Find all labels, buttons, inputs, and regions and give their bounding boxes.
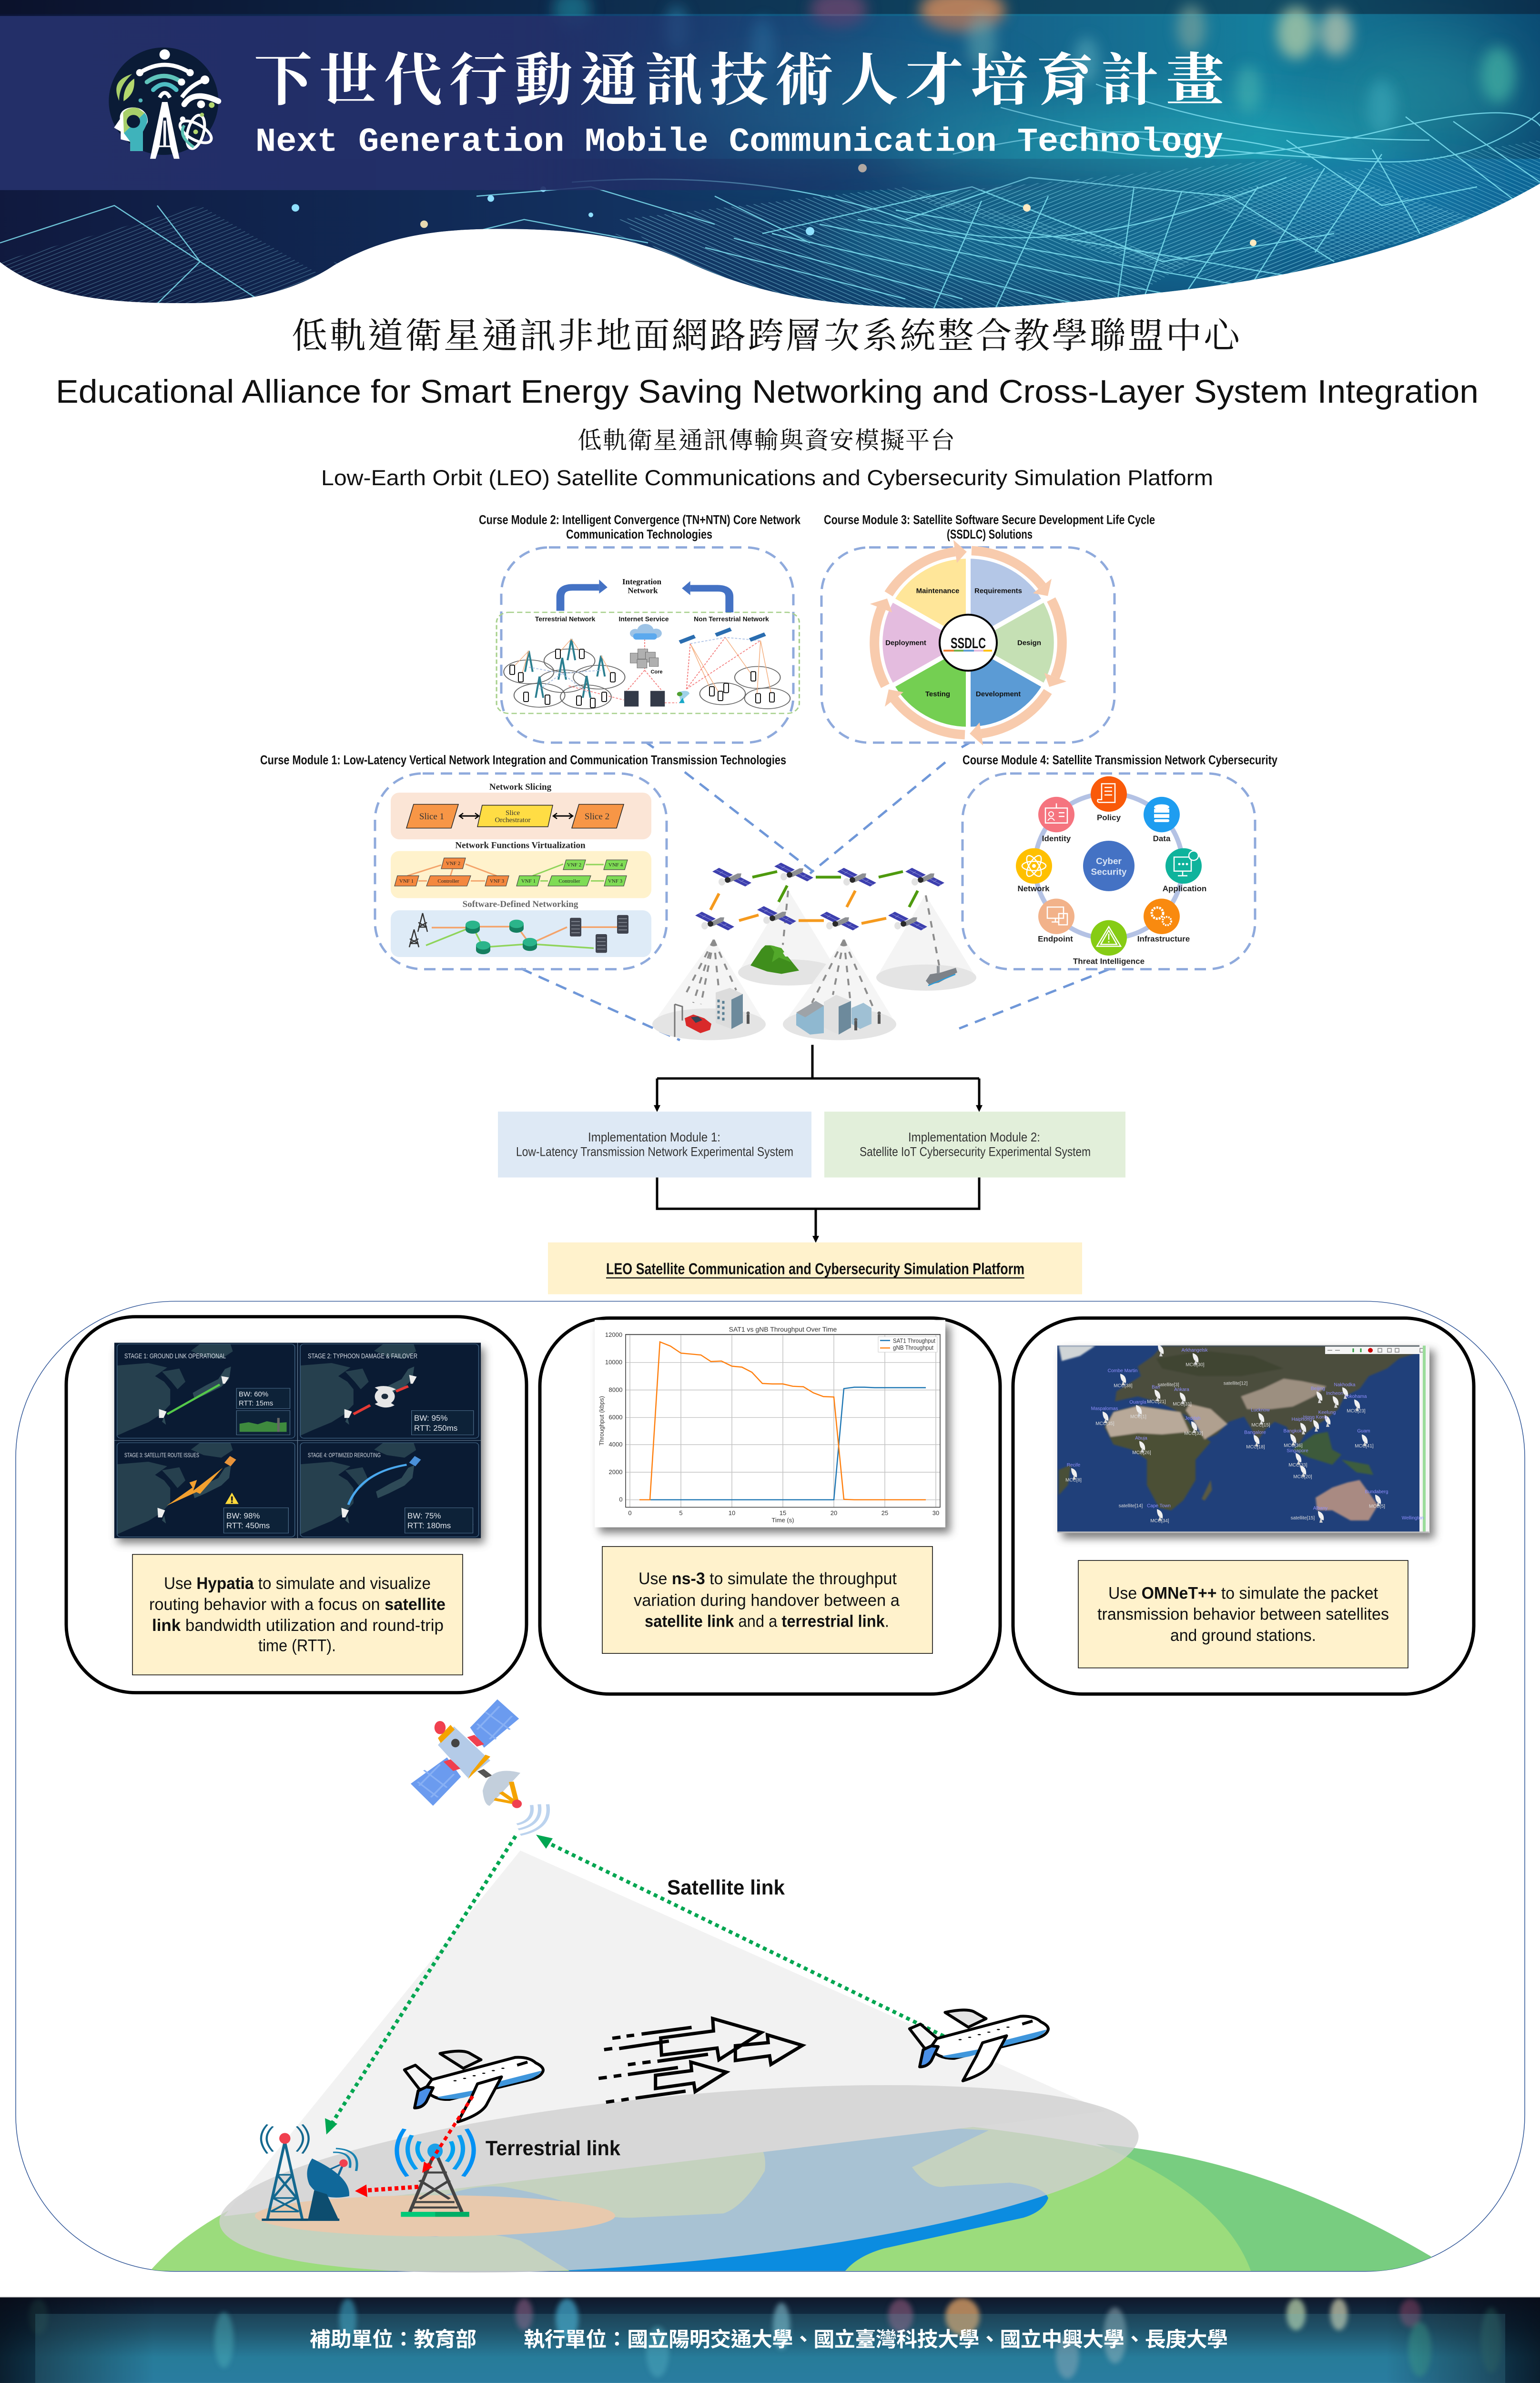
chart: throughput over time: SAT1 Throughput [893,1337,935,1344]
screenshot: OMNeT++ world map: satellite[3] [1158,1383,1179,1388]
screenshot: OMNeT++ world map: MCC[41] [1355,1444,1374,1449]
chart: SSDLC cycle wheel [845,526,1091,760]
box: simulation platform: LEO Satellite Communication and Cybersecurity Simulation Platform [606,1261,1024,1278]
diagram: network slicing: Network Slicing [489,782,552,792]
screenshot: OMNeT++ world map: Haiphong [1292,1417,1312,1422]
heading: course module 2: Communication Technologies [566,527,712,541]
link: satellite link dotted arrows [325,1834,950,2135]
box: simulation platform [548,1242,1082,1294]
label: satellite link: Satellite link [667,1876,785,1899]
box: implementation module 2: Satellite IoT Cybersecurity Experimental System [860,1145,1091,1159]
screenshot: OMNeT++ world map: Hong Kong [1303,1415,1327,1420]
diagram: network functions virtualization: Controller [558,878,580,884]
coverage cone: mountain [738,890,838,986]
screenshot: OMNeT++ world map: Nakhodka [1334,1383,1356,1388]
chart: throughput over time: 0 [628,1509,632,1517]
diagram: integration network: Network [628,586,658,595]
caption: Hypatia: routing behavior with a focus on satellite [149,1595,446,1614]
icon: airplane left [405,2051,543,2122]
caption: OMNeT++: transmission behavior between satellites [1097,1605,1389,1624]
screenshot: OMNeT++ world map: MCC[1] [1130,1414,1146,1419]
screenshot: OMNeT++ world map: MCC[23] [1347,1409,1366,1414]
screenshot: OMNeT++ world map: MCC[8] [1065,1478,1082,1483]
heading: alliance English: Educational Alliance for Smart Energy Saving Networking and Cross-Layer System Integration [56,373,1479,410]
chart: SSDLC cycle wheel: Requirements [974,588,1022,595]
heading: course module 4: Course Module 4: Satellite Transmission Network Cybersecurity [962,753,1277,767]
coverage cone: car and building [652,939,766,1040]
chart: cyber security ring: Infrastructure [1137,935,1190,944]
screenshot: OMNeT++ world map: Incheon [1326,1391,1343,1396]
box: implementation module 2 [824,1111,1125,1178]
chart: throughput over time: 5 [679,1509,683,1517]
screenshot: OMNeT++ world map: satellite[14] [1119,1504,1143,1508]
panel: module 3 dashed frame [821,548,1114,743]
label: terrestrial link: Terrestrial link [486,2137,621,2160]
chart: SSDLC cycle wheel: Development [976,691,1021,698]
satellites [695,863,944,930]
chart: throughput over time: 30 [932,1509,939,1517]
chart: cyber security ring: Identity [1042,834,1071,843]
chart: cyber security ring: Cyber [1096,856,1122,866]
footer banner [0,2296,1540,2383]
coverage cone: city [783,939,896,1040]
panel: module 2 dashed frame [501,548,793,743]
chart: throughput over time: 15 [780,1509,786,1517]
chart: throughput over time: 10 [729,1509,735,1517]
screenshot: Hypatia routing stages: RTT: 250ms [414,1424,457,1433]
screenshot: OMNeT++ world map: Singapore [1287,1448,1308,1454]
caption: Hypatia: link bandwidth utilization and round-trip [152,1616,444,1635]
illustration: terrestrial coverage area [255,2195,615,2236]
screenshot: OMNeT++ world map: MCC[31] [1173,1402,1192,1407]
screenshot: OMNeT++ world map: MCC[34] [1150,1518,1169,1524]
diagram: network functions virtualization: VNF 3 [608,878,623,884]
screenshot: OMNeT++ world map: MCC[36] [1284,1443,1303,1448]
chart: cyber security ring: Endpoint [1038,935,1073,944]
diagram: software-defined networking [391,899,651,957]
screenshot: OMNeT++ world map: Yokohama [1345,1394,1367,1399]
chart: cyber security ring: Application [1163,884,1206,893]
screenshot: OMNeT++ world map: MCC[21] [1147,1399,1166,1405]
heading: course module 2: Curse Module 2: Intelligent Convergence (TN+NTN) Core Network [479,513,800,527]
screenshot: OMNeT++ world map: MCC[26] [1132,1450,1151,1456]
header banner [0,0,1540,317]
chart: throughput over time: 2000 [609,1468,622,1476]
screenshot: OMNeT++ world map: Ankara [1174,1387,1189,1392]
diagram: integration network: Core [650,669,663,675]
screenshot: OMNeT++ world map: Bangkok [1284,1429,1302,1434]
diagram: network functions virtualization: Controller [437,878,459,884]
diagram: integration network: Non Terrestrial Network [694,615,769,622]
icon: radio tower left [261,2125,309,2220]
screenshot: Hypatia routing stages: STAGE 4: OPTIMIZED REROUTING [308,1452,381,1459]
screenshot: Hypatia routing stages: STAGE 1: GROUND LINK OPERATIONAL [124,1353,226,1360]
caption: Hypatia [132,1554,463,1675]
caption: ns-3 [602,1547,932,1653]
diagram: network functions virtualization [391,841,651,898]
heading: course module 3 [824,513,1155,541]
icon: cell tower [397,2129,474,2217]
chart: throughput over time [595,1320,950,1533]
flow: arrows to simulation platform [657,1178,979,1243]
chart: SSDLC cycle wheel: Testing [925,691,950,698]
screenshot: Hypatia routing stages: RTT: 450ms [226,1521,270,1530]
coverage cone: ship [876,895,976,991]
diagram: integration network: Integration [622,577,662,586]
screenshot: OMNeT++ world map: Lucknow [1251,1408,1270,1413]
diagram: network slicing: Orchestrator [495,816,531,824]
box: implementation module 1: Implementation Module 1: [588,1130,720,1144]
screenshot: OMNeT++ world map: Jeddah [1185,1416,1200,1421]
chart: throughput over time: SAT1 vs gNB Throughput Over Time [729,1325,837,1333]
footer: sponsor text: 補助單位：教育部 [310,2322,476,2352]
chart: throughput over time: gNB Throughput [893,1344,933,1351]
screenshot: OMNeT++ world map: MCC[35] [1095,1421,1114,1426]
screenshot: OMNeT++ world map: satellite[12] [1224,1381,1248,1386]
illustration: satellite beam cone [224,1851,1105,2216]
heading: alliance Chinese: 低軌道衛星通訊非地面網路跨層次系統整合教學聯盟中心 [292,307,1241,358]
icon: airplane right [910,2010,1048,2081]
screenshot: OMNeT++ world map: Maspalomas [1091,1406,1118,1412]
screenshot: OMNeT++ world map: MCC[18] [1246,1445,1265,1450]
caption: ns-3: variation during handover between a [634,1591,900,1609]
screenshot: OMNeT++ world map: Bundaberg [1365,1489,1388,1495]
screenshot: Hypatia routing stages: BW: 98% [226,1511,260,1520]
icon: motion arrows [598,2018,802,2102]
screenshot: OMNeT++ world map: MCC[15] [1251,1423,1270,1428]
screenshot: OMNeT++ world map: Recife [1067,1463,1081,1468]
diagram: software-defined networking: Software-Defined Networking [463,899,578,909]
box: implementation module 1: Low-Latency Transmission Network Experimental System [516,1145,793,1159]
screenshot: OMNeT++ world map: Abuja [1135,1436,1147,1441]
caption: Hypatia: Use Hypatia to simulate and visualize [164,1574,431,1593]
diagram: network functions virtualization: Network Functions Virtualization [455,841,586,851]
diagram: network functions virtualization: VNF 4 [608,862,623,868]
screenshot: Hypatia routing stages: STAGE 2: TYPHOON DAMAGE & FAILOVER [308,1353,417,1360]
diagram: network slicing [391,782,651,839]
chart: throughput over time: 25 [881,1509,888,1517]
screenshot: OMNeT++ world map: Keelung [1318,1410,1336,1415]
screenshot: OMNeT++ world map: Combe Martin [1108,1368,1137,1374]
screenshot: Hypatia routing stages [114,1343,484,1543]
caption: OMNeT++ [1078,1560,1408,1668]
heading: platform English: Low-Earth Orbit (LEO) Satellite Communications and Cybersecurity Simulation Platform [321,466,1213,490]
diagram: network functions virtualization: VNF 2 [567,862,581,868]
caption: Hypatia: time (RTT). [258,1636,336,1655]
screenshot: Hypatia routing stages: RTT: 15ms [239,1400,273,1407]
chart: SSDLC cycle wheel: Deployment [885,640,926,647]
screenshot: OMNeT++ world map: Ouargla [1129,1400,1146,1405]
program logo [109,48,218,159]
screenshot: OMNeT++ world map: Bari [1152,1385,1160,1390]
chart: cyber security ring: Network [1017,884,1050,893]
diagram: integration network: Terrestrial Network [535,615,596,622]
screenshot: OMNeT++ world map: MCC[32] [1184,1431,1203,1436]
screenshot: OMNeT++ world map: MCC[30] [1185,1363,1205,1367]
screenshot: OMNeT++ world map: satellite[15] [1291,1516,1315,1521]
title: English program name: Next Generation Mobile Communication Technology [255,123,1223,161]
icon: satellite [411,1700,548,1835]
screenshot: OMNeT++ world map [1057,1344,1434,1538]
heading: course module 3: Course Module 3: Satellite Software Secure Development Life Cycle [824,513,1155,527]
diagram: network functions virtualization: VNF 1 [521,878,536,884]
screenshot: OMNeT++ world map: Cape Town [1147,1504,1171,1508]
chart: cyber security ring [1016,776,1206,966]
footer: executing universities text: 執行單位：國立陽明交通大學、國立臺灣科技大學、國立中興大學、長庚大學 [524,2322,1228,2352]
screenshot: OMNeT++ world map: MCC[33] [1288,1463,1307,1468]
screenshot: Hypatia routing stages: BW: 95% [414,1414,448,1423]
screenshot: Hypatia routing stages: RTT: 180ms [407,1521,451,1530]
chart: cyber security ring: Security [1091,867,1127,877]
screenshot: Hypatia routing stages: STAGE 3: SATELLITE ROUTE ISSUES [124,1452,199,1459]
card: OMNeT++ [1013,1318,1474,1694]
dashed connectors from modules to constellation [521,743,1109,1040]
illustration: satellite coverage footprint [211,2052,1147,2306]
panel: outer simulation frame [16,1301,1525,2271]
illustration: earth [150,2115,1455,2271]
screenshot: OMNeT++ world map: Wellington [1402,1516,1424,1521]
chart: throughput over time: 10000 [605,1359,622,1366]
flow: arrows to implementation modules [654,1045,983,1112]
diagram: LEO satellite constellation [652,863,976,1040]
chart: cyber security ring: Data [1153,834,1171,843]
diagram: network slicing: Slice 1 [419,812,444,822]
diagram: network slicing: Slice 2 [585,812,609,822]
box: implementation module 2: Implementation Module 2: [908,1130,1040,1144]
diagram: network slicing: Slice [506,809,520,817]
chart: SSDLC cycle wheel: SSDLC [951,635,986,652]
screenshot: OMNeT++ world map: Beijing [1311,1386,1325,1391]
screenshot: Hypatia routing stages: BW: 75% [407,1511,441,1520]
diagram: integration network [496,577,799,713]
diagram: network functions virtualization: VNF 2 [446,861,460,866]
panel: module 1 dashed frame [375,774,667,969]
chart: throughput over time: Throughput (kbps) [598,1396,605,1446]
chart: cyber security ring: Threat Intelligence [1073,957,1145,966]
chart: SSDLC cycle wheel: Maintenance [916,588,959,595]
panel: module 4 dashed frame [962,774,1255,969]
screenshot: OMNeT++ world map: Albany [1313,1506,1327,1511]
screenshot: OMNeT++ world map: Arkhangelsk [1182,1348,1208,1353]
screenshot: OMNeT++ world map: MCC[20] [1293,1475,1312,1480]
heading: course module 3: (SSDLC) Solutions [947,527,1033,541]
screenshot: OMNeT++ world map: MCC[5] [1369,1504,1385,1509]
screenshot: OMNeT++ world map: Bangalore [1244,1430,1266,1436]
caption: OMNeT++: Use OMNeT++ to simulate the packet [1108,1584,1378,1602]
diagram: integration network: Internet Service [618,615,669,622]
chart: SSDLC cycle wheel: Design [1017,640,1041,647]
chart: throughput over time: 4000 [609,1441,622,1448]
caption: OMNeT++: and ground stations. [1170,1626,1316,1645]
chart: throughput over time: 20 [831,1509,837,1517]
link: terrestrial link dotted arrows [355,2096,473,2197]
chart: throughput over time: 12000 [605,1331,622,1338]
heading: platform Chinese: 低軌衛星通訊傳輸與資安模擬平台 [578,421,955,456]
box: implementation module 1 [498,1111,811,1178]
caption: ns-3: satellite link and a terrestrial link. [645,1612,889,1630]
screenshot: Hypatia routing stages: BW: 60% [239,1391,268,1398]
title: Chinese program name: 下世代行動通訊技術人才培育計畫 [254,34,1224,116]
screenshot: OMNeT++ world map: MCC[38] [1114,1384,1133,1389]
chart: throughput over time: Time (s) [771,1517,794,1524]
diagram: network functions virtualization: VNF 1 [399,878,414,884]
chart: throughput over time: 8000 [609,1386,622,1393]
heading: course module 1: Curse Module 1: Low-Latency Vertical Network Integration and Communication Transmission Technologies [260,753,786,767]
heading: course module 2 [479,513,800,541]
icon: satellite dish [300,2149,357,2220]
caption: ns-3: Use ns-3 to simulate the throughput [638,1569,897,1588]
chart: cyber security ring: Policy [1097,813,1121,822]
inter-satellite links [710,872,918,923]
chart: throughput over time: 6000 [609,1414,622,1421]
card: ns-3 [540,1318,1000,1694]
chart: throughput over time: 0 [619,1496,623,1503]
card: Hypatia [66,1317,527,1693]
diagram: network functions virtualization: VNF 3 [490,878,505,884]
screenshot: OMNeT++ world map: Guam [1357,1429,1370,1434]
